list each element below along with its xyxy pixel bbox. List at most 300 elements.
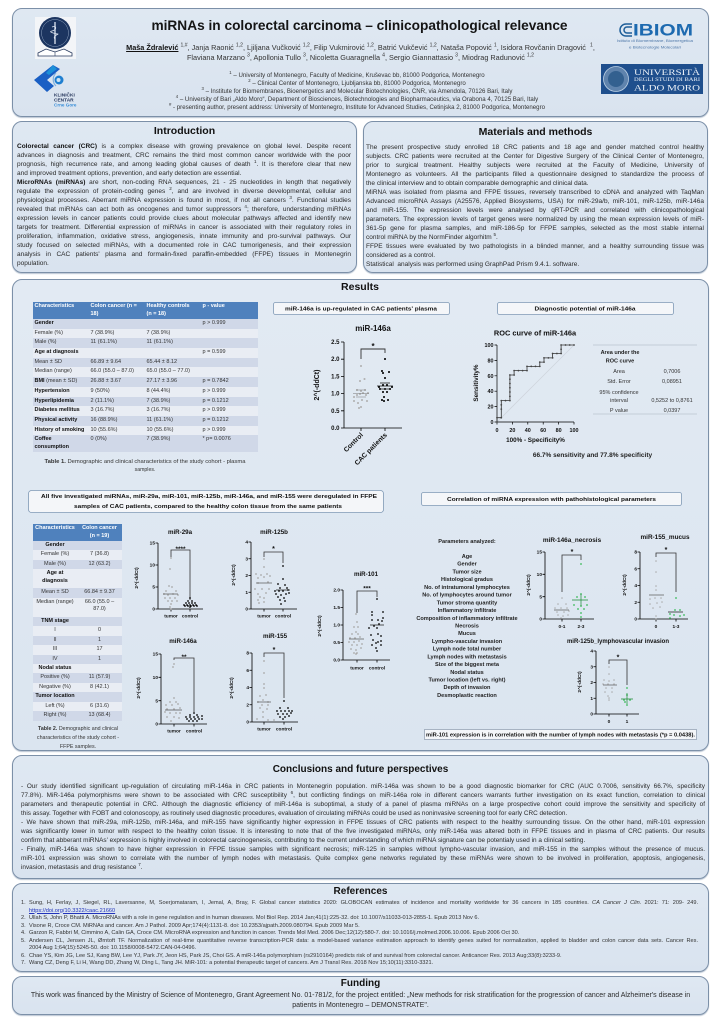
text: introduction body: MicroRNAs (miRNAs) are short, non-coding RNA sequences, 21 - 25 nucleotides in length that negatively <box>17 179 351 186</box>
chart: ROC curve: ROC curve of miR-146a <box>494 328 577 338</box>
panel: header <box>12 8 709 117</box>
table 2: Colon cancer <box>82 525 117 531</box>
table 1: 3 (16.7%) <box>90 407 114 413</box>
results charts and callouts <box>28 281 697 750</box>
table 1: Hypertension <box>34 388 70 394</box>
text: reference list <box>21 900 698 966</box>
icon: University of Bari logo: ALDO MORO <box>634 82 700 92</box>
heading: introduction: Introduction <box>154 125 215 137</box>
text: reference list: 1. <box>21 900 26 906</box>
chart: miR-146a FFPE: tumor <box>167 728 181 734</box>
panel: results <box>12 279 709 751</box>
chart: miR-125b lymphovascular invasion: 1 <box>626 719 629 725</box>
table 2: Nodal status <box>38 665 72 671</box>
chart: miR-146a necrosis <box>526 537 602 630</box>
logos <box>34 17 703 108</box>
text: methods body: Statistical analysis was performed using GraphPad Prism 9.4.1. software. <box>366 261 579 268</box>
caption: table 2: characteristics of the study cohort - <box>37 735 119 741</box>
table 2: TNM stage <box>41 618 69 624</box>
table 2: Male (%) <box>44 561 66 567</box>
chart: miR-155 mucus: 8 <box>634 550 637 556</box>
chart: miR-146a necrosis: 10 <box>537 572 542 578</box>
chart: miR-146a necrosis: miR-146a_necrosis <box>543 537 602 544</box>
text: reference list: 7. <box>21 960 26 966</box>
table 2: 87.0) <box>93 606 106 612</box>
chart: miR-155: 6 <box>246 668 249 674</box>
text: methods body: prior to surgical treatment. Healthy subjects were recruited at the Faculty of Medicine, University of <box>366 162 704 169</box>
table 1: Characteristics <box>34 303 74 309</box>
chart: miR-146a FFPE: 2^(-ddCt) <box>136 677 142 699</box>
text: reference list: https://doi.org/10.3322/caac.21660 <box>29 908 115 914</box>
text: reference list: 2004 Aug 1;64(15):5245-50. doi: 10.1158/0008-5472.CAN-04-0496. <box>29 945 196 951</box>
icon: IBIOM logo: IBIOM <box>633 22 693 40</box>
text: methods body: control miRNA by the NormFinder algorhitm 5. <box>366 232 498 241</box>
caption: table 1: samples. <box>135 467 155 473</box>
icon: IBIOM logo: Istituto di Biomembrane, Bioenergetica <box>617 39 693 43</box>
table: area under the ROC curve: 0,7006 <box>664 369 680 375</box>
table 1: 18) <box>90 311 98 317</box>
table 1: 7 (38.9%) <box>146 436 170 442</box>
authors: Flaviana Marzano 3, Apollonia Tullo 3, Nicoletta Guaragnella 4, Sergio Giannattasio 3, Miodrag Radunović 1,2 <box>187 52 534 62</box>
table 1: 65.44 ± 8.12 <box>146 359 177 365</box>
chart: miR-101: miR-101 <box>354 571 379 578</box>
chart: miR-29a: 15 <box>150 541 155 547</box>
table 2: Positive (%) <box>40 674 70 680</box>
table 2: 13 (68.4) <box>88 712 110 718</box>
table: area under the ROC curve: 95% confidence <box>599 390 639 396</box>
table 2: 0 <box>98 627 101 633</box>
table 1: Healthy controls <box>146 303 190 309</box>
list: parameters analyzed: Parameters analyzed: <box>438 539 496 545</box>
list: parameters analyzed: Depth of invasion <box>444 685 491 691</box>
table 1: 9 (50%) <box>90 388 110 394</box>
text: methods body: 361-5p gene for plasma samples, and miR-186-5p for FFPE samples, selected as the most stable internal <box>366 225 704 232</box>
chart: miR-125b: 1 <box>245 590 248 596</box>
table 2: Mean ± SD <box>41 589 69 595</box>
text: reference list: Ullah S, John P, Bhatti A. MicroRNAs with a role in gene regulation and in human diseases. Mol Biol Rep. 2014 Jan;41(1):225-32. doi: 10.1007/s11033-013-2855-1. Epub 2013 Nov 6. <box>29 915 479 921</box>
list: parameters analyzed: Lymph node total number <box>433 647 502 653</box>
chart: miR-146a FFPE: control <box>186 728 202 734</box>
heading: materials and methods: Materials and methods <box>479 126 592 138</box>
chart: miR-146a plasma: CAC patients <box>354 432 389 467</box>
table 1: Age at diagnosis <box>34 349 79 355</box>
table 1: 11 (61.1%) <box>146 339 173 345</box>
text: introduction body: revealed that miRNAs can act both as oncogenes and tumor suppressors 4; therefore, understanding miRNAs <box>17 204 351 213</box>
text: reference list: Garzon R, Fabbri M, Cimmino A, Calin GA, Croce CM. MicroRNA expression and function in cancer. Trends Mol Med. 2006 Dec;12(12):580-7. doi: 10.1016/j.molmed.2006.10.006. Epub 2006 Oct 30. <box>29 930 519 936</box>
chart: miR-125b lymphovascular invasion: 4 <box>590 649 593 655</box>
table 2: 1 <box>98 656 101 662</box>
table 2: 66.84 ± 9.37 <box>84 589 115 595</box>
chart: miR-29a: **** <box>175 546 186 553</box>
chart: miR-29a: 5 <box>152 585 155 591</box>
chart: miR-146a FFPE: 10 <box>153 675 158 681</box>
chart: miR-155: tumor <box>257 726 271 732</box>
text: methods body: FFPE tissues were evaluated by two pathologists in a blinded manner, and a healthy surrounding tissue was <box>366 243 704 250</box>
table: area under the ROC curve: P value <box>610 408 628 414</box>
chart: ROC curve <box>473 328 578 444</box>
callout: diagnostic potential: Diagnostic potential of miR-146a <box>534 306 636 312</box>
table 1: 16 (88.9%) <box>90 417 117 423</box>
chart: ROC curve: 0 <box>496 428 498 434</box>
list: parameters analyzed: Inflammatory infiltrate <box>438 608 496 614</box>
table 1: 3 (16.7%) <box>146 407 170 413</box>
chart: miR-146a necrosis: * <box>571 549 574 556</box>
table: area under the ROC curve <box>593 345 697 414</box>
text: methods body: subjects. CRC patients were recruited at the Center for Digestive Surgery of the Clinical Center of Montenegro, <box>366 153 704 160</box>
chart: ROC curve: 20 <box>488 405 494 411</box>
list: parameters analyzed: Necrosis <box>455 624 479 630</box>
table 1: Hyperlipidemia <box>34 398 74 404</box>
callout: diagnostic potential <box>498 302 674 314</box>
icon: University of Bari logo <box>601 64 703 94</box>
chart: miR-125b: tumor <box>257 614 271 620</box>
list: parameters analyzed: No. of intratumoral lymphocytes <box>424 585 510 591</box>
chart: ROC curve: 60 <box>488 374 494 380</box>
chart: miR-125b: 4 <box>245 540 248 546</box>
affiliations: # - presenting author, present address: University of Montenegro, Institute for Advanced Studies, Cetinjska 2, 81000 Podgorica, Montenegro <box>169 102 545 111</box>
icon: Klinički Centar logo: KLINIČKI <box>54 92 75 98</box>
callout: miR-101 correlation: miR-101 expression is in correlation with the number of lymph nodes with metastasis (*p = 0.0438). <box>426 732 696 738</box>
text: conclusions body: this assay. Together with FOBT and colonoscopy, as routinely used diagnostic procedures, evaluation of circulating miRNAs could be used as noninvasive screening tool for early CRC detection. <box>21 810 567 817</box>
chart: miR-155: 8 <box>246 651 249 657</box>
chart: miR-29a: 10 <box>150 563 155 569</box>
table 2: 11 (57.9) <box>89 674 110 680</box>
chart: miR-146a plasma: miR-146a <box>355 324 391 333</box>
table: area under the ROC curve: Std. Error <box>607 379 631 385</box>
text: methods body: and miR-155. The expression levels were analysed by qRT-PCR and correlated with clinicopathological <box>366 207 704 214</box>
text: introduction body: physiological processes. Aberrant miRNA expression is found in most, if not all cancers 3. Functional studies <box>17 195 351 204</box>
table 2 <box>33 524 122 721</box>
caption: table 2: FFPE samples. <box>60 744 96 750</box>
text: conclusions body <box>21 783 706 871</box>
text: reference list: 2. <box>21 915 26 921</box>
table 1: p > 0.999 <box>202 407 226 413</box>
panel: conclusions <box>12 755 709 879</box>
chart: miR-146a necrosis: 5 <box>539 594 542 600</box>
list: parameters analyzed: Nodal status <box>450 670 484 676</box>
chart: miR-101: *** <box>363 586 371 592</box>
chart: miR-29a: tumor <box>164 614 178 620</box>
chart: miR-155 mucus: 2^(-ddCt) <box>622 574 628 596</box>
panel: references <box>12 883 709 972</box>
list: parameters analyzed: Lympho-vascular invasion <box>432 639 503 645</box>
authors <box>126 42 595 62</box>
text: conclusions body: 77.8%). MiR-146a polymorphisms were shown to be associated with CRC susceptibility 6, but conflicting findings on miR-146a role in different cancers warrants further investigation on its exact function, correlation to clinical <box>21 790 705 799</box>
table 1: p = 0.7842 <box>202 378 229 384</box>
table 2: IV <box>52 656 58 662</box>
table 2: III <box>53 646 57 652</box>
table 2: Gender <box>45 542 65 548</box>
text: introduction body: study focused on selected miRNAs, with a documented role in CAC tumorigenesis, and their expression <box>17 242 351 249</box>
table: area under the ROC curve: 0,0397 <box>664 408 680 414</box>
table 1: Physical activity <box>34 417 77 423</box>
icon: medical faculty logo <box>35 17 76 59</box>
table 2: 17 <box>96 646 103 652</box>
chart: miR-101: control <box>369 666 385 672</box>
table 1: 10 (55.6%) <box>90 427 117 433</box>
chart: miR-29a: miR-29a <box>168 529 193 536</box>
table 1: BMI (mean ± SD) <box>34 378 77 384</box>
chart: miR-101: 1.5 <box>333 605 340 611</box>
chart: miR-155 mucus: miR-155_mucus <box>640 534 690 541</box>
list: parameters analyzed: Tumor stroma quantity <box>437 600 498 606</box>
list: parameters analyzed: Lymph nodes with metastasis <box>427 654 507 660</box>
affiliations: 4 – University of Bari „Aldo Moro“, Department of Biosciences, Biotechnologies and Biopharmaceutics, via Orabona 4, 70125 Bari, Italy <box>176 94 538 103</box>
table 2: II <box>53 637 57 643</box>
table 1: 10 (55.6%) <box>146 427 173 433</box>
table 1: 65.0 (55.0 – 77.0) <box>146 368 190 374</box>
chart: miR-125b lymphovascular invasion: 2 <box>590 680 593 686</box>
chart: miR-125b: 2^(-ddCt) <box>231 564 237 586</box>
text: funding body <box>31 992 690 1009</box>
text: methods body: Montenegro as volunteers. All the participants filled a questionnaire designed to standardize the process of <box>366 171 704 178</box>
chart: miR-101: 1.0 <box>333 623 340 629</box>
table 1: consumption <box>34 444 69 450</box>
chart: miR-146a FFPE: 5 <box>155 698 158 704</box>
table 2: 1 <box>98 637 101 643</box>
table 1: History of smoking <box>34 427 84 433</box>
chart: miR-155 mucus: * <box>665 547 668 554</box>
table 2: 6 (31.6) <box>90 703 109 709</box>
text: introduction body: expression levels in cancer patients could provide clues about molecular pathways affected and identify new <box>17 215 351 222</box>
icon: University of Bari logo: UNIVERSITÀ <box>634 67 701 77</box>
callout: correlation heading: Correlation of miRNA expression with pathohistological parameters <box>447 497 656 503</box>
table 1: Mean ± SD <box>34 359 62 365</box>
text: introduction body: prognosis, high recurrence rate, and among leading global causes of death 1. It is therefore clear that new <box>17 159 351 168</box>
chart: miR-101: 2^(-ddCt) <box>317 615 323 637</box>
text: reference list: 3. <box>21 923 26 929</box>
table: area under the ROC curve: 0,08951 <box>662 379 682 385</box>
icon: IBIOM logo: e Biotecnologie Molecolari <box>629 46 681 50</box>
table 1: 7 (38.9%) <box>146 330 170 336</box>
text: reference list: Visone R, Croce CM. MiRNAs and cancer. Am J Pathol. 2009 Apr;174(4):1131-8. doi: 10.2353/ajpath.2009.080794. Epub 2009 Mar 5. <box>29 923 360 929</box>
chart: ROC curve: 0 <box>490 420 494 426</box>
text: conclusions body: - Finally, miR-146a was shown to have higher expression in FFPE tissue samples with significant necrosis; miR-125 in samples without lympho-vascular invasion, and miR-155 in the samples without the presence of mucus. <box>21 846 705 853</box>
chart: miR-125b lymphovascular invasion: * <box>617 654 620 662</box>
table: area under the ROC curve: Area under the <box>601 350 639 356</box>
chart: miR-146a plasma: * <box>371 342 375 351</box>
chart: ROC curve: 100 <box>570 428 578 434</box>
text: reference list: Wang CZ, Deng F, Li H, Wang DD, Zhang W, Ding L, Tang JH. MiR-101: a potential therapeutic target of cancers. Am J Transl Res. 2018 Nov 15;10(11):3310-3321. <box>29 960 433 966</box>
table 2: Female (%) <box>41 551 69 557</box>
chart: miR-101: 2.0 <box>333 588 340 594</box>
text: sensitivity and specificity: 66.7% sensitivity and 77.8% specificity <box>533 452 652 459</box>
table 1: (n = 18) <box>146 311 166 317</box>
text: introduction body: proliferation, inflammation, oxidative stress, angiogenesis, innate immunity and pro-survival pathways. Our <box>17 233 351 240</box>
chart: miR-146a plasma: 0.0 <box>331 426 340 432</box>
list: parameters analyzed: Age <box>462 554 472 560</box>
text: introduction body: Colorectal cancer (CRC) is a complex disease with growing prevalence on global level. Despite recent <box>17 143 351 150</box>
chart: miR-125b: control <box>275 614 291 620</box>
table 2: 8 (42.1) <box>90 684 109 690</box>
list: parameters analyzed: Desmoplastic reaction <box>437 693 497 699</box>
chart: miR-125b: * <box>272 546 275 553</box>
chart: miR-146a plasma: Control <box>343 432 365 454</box>
table 1: Coffee <box>34 436 52 442</box>
text: conclusions body: parameters and therapeutic potential in CRC. Although the diagnostic efficiency of miR-146a is suboptimal, a study of a panel of plasma miRNAs on a large prospective cohort could improve the sensitivity and specificity of <box>21 801 705 808</box>
chart: miR-29a: 2^(-ddCt) <box>134 567 140 589</box>
chart: miR-125b lymphovascular invasion: 3 <box>590 664 593 670</box>
table 1: 26.88 ± 3.67 <box>90 378 121 384</box>
chart: miR-155: 4 <box>246 685 249 691</box>
table 1: Female (%) <box>34 330 63 336</box>
table 2: Right (%) <box>44 712 66 718</box>
table 1: 2 (11.1%) <box>90 398 114 404</box>
affiliations <box>169 70 545 111</box>
table 1: 27.17 ± 3.96 <box>146 378 177 384</box>
chart: miR-125b lymphovascular invasion: 0 <box>608 719 611 725</box>
chart: miR-146a FFPE: 0 <box>155 722 158 728</box>
chart: miR-146a plasma: 2.0 <box>331 357 340 363</box>
text: methods body: The present prospective study enrolled 18 CRC patients and 18 age and gender matched control healthy <box>366 144 704 151</box>
text: conclusions body: - We have shown that miR-29a, miR-125b, miR-146a, and miR-155 have significantly higher expression in FFPE tissues of CRC patients with respect to the healthy surrounding tissue. On the other hand, miR-101 expression <box>21 819 705 826</box>
list: parameters analyzed: Composition of inflammatory infiltrate <box>416 616 518 622</box>
icon: Klinički Centar logo: Crne Gore <box>54 102 77 108</box>
table 2: 7 (36.8) <box>90 551 109 557</box>
caption: table 1 <box>44 459 246 473</box>
chart: miR-155 mucus: 1-3 <box>673 624 680 630</box>
chart: miR-125b <box>231 529 297 620</box>
chart: miR-29a <box>134 529 203 620</box>
chart: miR-155: * <box>273 647 276 654</box>
chart: miR-155 mucus: 4 <box>634 583 637 589</box>
list: parameters analyzed: Mucus <box>458 631 476 637</box>
list: parameters analyzed: Histological gradus <box>441 577 493 583</box>
list: parameters analyzed: Size of the biggest meta <box>435 662 500 668</box>
chart: miR-146a plasma: 1.5 <box>331 374 340 380</box>
table 1: 66.89 ± 9.64 <box>90 359 121 365</box>
chart: miR-155: miR-155 <box>263 633 288 640</box>
text: conclusions body: confirm that abberant miRNAs' expression is highly involved in colorectal carcinogenesis, contributing to the current understanding of which miRNA signature can be potentialy used in a clinical setting. <box>21 837 585 844</box>
title: miRNAs in colorectal carcinoma – clinicopathological relevance <box>151 18 568 33</box>
table 2: Median (range) <box>36 599 74 605</box>
table 2: 66.0 (55.0 – <box>85 599 114 605</box>
chart: miR-146a necrosis: 2-3 <box>578 624 585 630</box>
table: area under the ROC curve: interval <box>610 398 628 404</box>
chart: miR-146a plasma: 2.5 <box>331 340 340 346</box>
authors: Maša Ždralević 1,#, Janja Raonić 1,2, Ljiljana Vučković 1,2, Filip Vukmirović 1,2, Batrić Vukčević 1,2, Nataša Popović 1, Isidora Rovčanin Dragović 1, <box>126 43 595 52</box>
affiliations: 2 – Clinical Center of Montenegro, Ljubljanska bb, 81000 Podgorica, Montenegro <box>248 78 466 87</box>
chart: miR-155 mucus: 0 <box>655 624 658 630</box>
table 1: Median (range) <box>34 368 72 374</box>
text: conclusions body: invasion, metastasis and drug resistance 7. <box>21 862 143 871</box>
text: reference list: Sung, H, Ferlay, J, Siegel, RL, Laversanne, M, Soerjomataram, I, Jemal, A, Bray, F. Global cancer statistics 2020: GLOBOCAN estimates of incidence and mortality worldwide for 36 cancers in 185 countries. CA Cancer J Clin. 2021: 71: 209- 249. <box>29 900 698 906</box>
text: methods body: MiRNA was isolated from plasma and FFPE tissues, reversely transcribed to cDNA and analyzed with TaqMan <box>366 189 704 196</box>
text: introduction body <box>17 143 351 267</box>
table 1: p > 0.999 <box>202 427 226 433</box>
callout: plasma up-regulation: miR-146a is up-regulated in CAC patients' plasma <box>285 306 438 312</box>
text: conclusions body: miR-101 expression was shown to correlate with the number of lymph nodes with metastasis. Quite complex gene networks regulated by these miRNAs were shown to be involved in proliferation, apoptosis, angiogenesis, <box>21 855 705 862</box>
chart: miR-125b lymphovascular invasion <box>567 639 669 725</box>
chart: ROC curve: 80 <box>488 358 494 364</box>
table 2: Age at <box>47 570 63 576</box>
text: reference list: 6. <box>21 953 26 959</box>
affiliations: 1 – University of Montenegro, Faculty of Medicine, Kruševac bb, 81000 Podgorica, Montenegro <box>229 70 485 79</box>
heading: conclusions: Conclusions and future perspectives <box>273 764 448 775</box>
chart: ROC curve: 20 <box>509 428 515 434</box>
table 1: Male (%) <box>34 339 57 345</box>
panel: introduction <box>12 121 357 273</box>
chart: miR-146a plasma <box>313 324 402 467</box>
caption: table 2: Table 2. Demographic and clinical <box>38 726 118 732</box>
text: introduction body: targets for treatment. Differential expression of miRNAs in cancer is associated with their regulatory roles in <box>17 224 351 231</box>
chart: ROC curve: 80 <box>556 428 562 434</box>
chart: miR-146a plasma: 2^(-ddCt) <box>313 370 321 400</box>
chart: miR-155: 2^(-ddCt) <box>229 677 235 699</box>
callout: FFPE deregulation: All five investigated miRNAs, miR-29a, miR-101, miR-125b, miR-146a, and miR-155 were deregulated in FFPE <box>41 494 377 500</box>
chart: miR-146a FFPE: ** <box>181 654 187 661</box>
caption: table 1: Table 1. Demographic and clinical characteristics of the study cohort - plasma <box>44 459 246 465</box>
chart: miR-146a FFPE <box>136 638 207 734</box>
table 1: Diabetes mellitus <box>34 407 80 413</box>
chart: miR-101: 0.5 <box>333 640 340 646</box>
text: reference list: Chae YS, Kim JG, Lee SJ, Kang BW, Lee YJ, Park JY, Jeon HS, Park JS, Choi GS. A miR-146a polymorphism (rs2910164) predicts risk of and survival from colorectal cancer. Anticancer Res. 2013 Aug;33(8):3233-9. <box>29 953 562 959</box>
chart: miR-155 mucus: 6 <box>634 566 637 572</box>
table 2: Characteristics <box>35 525 75 531</box>
affiliations: 3 – Institute for Biomembranes, Bioenergetics and Molecular Biotechnologies, CNR, via Amendola, 70126 Bari, Italy <box>202 86 512 95</box>
table 1: p = 0.1212 <box>202 417 229 423</box>
list: parameters analyzed <box>416 539 518 699</box>
chart: miR-125b lymphovascular invasion: 1 <box>590 696 593 702</box>
list: parameters analyzed: No. of lymphocytes around tumor <box>422 593 513 599</box>
callout: FFPE deregulation <box>28 490 384 512</box>
text: conclusions body: - Our study identified significant up-regulation of circulating miR-146a in CRC patients in Montenegrin population. miR-146a was shown to be a good diagnostic biomarker for CRC (AUC 0.7006, sensitivity 66.7%, specificity <box>21 783 705 790</box>
callout: FFPE deregulation: samples of CAC patients, compared to the healthy colon tissue from the same patients <box>74 504 342 510</box>
table 1: p = 0.599 <box>202 349 226 355</box>
table 1: 11 (61.1%) <box>90 339 117 345</box>
table 1: 8 (44.4%) <box>146 388 170 394</box>
icon: Klinički Centar logo: CENTAR <box>54 98 74 104</box>
table 2: Tumor location <box>35 693 75 699</box>
chart: miR-155: 2 <box>246 702 249 708</box>
text: methods body <box>366 144 704 268</box>
chart: ROC curve: 40 <box>525 428 531 434</box>
panel: funding <box>12 976 709 1015</box>
table: area under the ROC curve: 0,5252 to 0,8761 <box>651 398 693 404</box>
chart: miR-125b lymphovascular invasion: 2^(-ddCt) <box>577 671 583 693</box>
table 1 <box>33 302 258 452</box>
text: reference list: 5. <box>21 938 26 944</box>
chart: miR-146a necrosis: 0-1 <box>559 624 566 630</box>
icon: Klinički Centar logo <box>34 65 77 108</box>
chart: miR-155 mucus <box>622 534 690 630</box>
chart: miR-125b: 0 <box>245 607 248 613</box>
chart: miR-146a necrosis: 0 <box>539 617 542 623</box>
chart: ROC curve: 100% - Specificity% <box>506 437 565 444</box>
chart: miR-125b lymphovascular invasion: miR-125b_lymphovascular invasion <box>567 639 669 645</box>
icon: University of Bari logo: DEGLI STUDI DI BARI <box>634 77 700 83</box>
text: methods body: Advanced microRNA Assays (A25576, Applied Biosystems, USA) for miR-29a/b, miR-101, miR-125b, miR-146a <box>366 198 704 205</box>
chart: miR-101: tumor <box>350 666 364 672</box>
chart: miR-146a plasma: 1.0 <box>331 392 340 398</box>
heading: references: References <box>334 886 387 897</box>
chart: miR-125b: 2 <box>245 573 248 579</box>
panel: materials and methods <box>363 121 708 273</box>
chart: miR-125b: miR-125b <box>260 529 288 536</box>
text: reference list: 4. <box>21 930 26 936</box>
chart: miR-125b: 3 <box>245 556 248 562</box>
table 2: (n = 19) <box>90 533 109 539</box>
chart: ROC curve: 40 <box>488 389 494 395</box>
chart: miR-146a FFPE: 15 <box>153 652 158 658</box>
list: parameters analyzed: Tumor size <box>452 569 482 575</box>
text: introduction body: analysis in CAC patients' plasma and formalin-fixed paraffin-embedded (FFPE) tissues in Montenegrin <box>17 251 351 258</box>
table 1: p > 0.999 <box>202 388 226 394</box>
chart: miR-146a necrosis: 2^(-ddCt) <box>526 574 532 596</box>
table 2: 12 (63.2) <box>88 561 110 567</box>
table 1: 0 (0%) <box>90 436 107 442</box>
text: funding body: patients in Montenegro – DEMONSTRATE". <box>292 1002 429 1009</box>
